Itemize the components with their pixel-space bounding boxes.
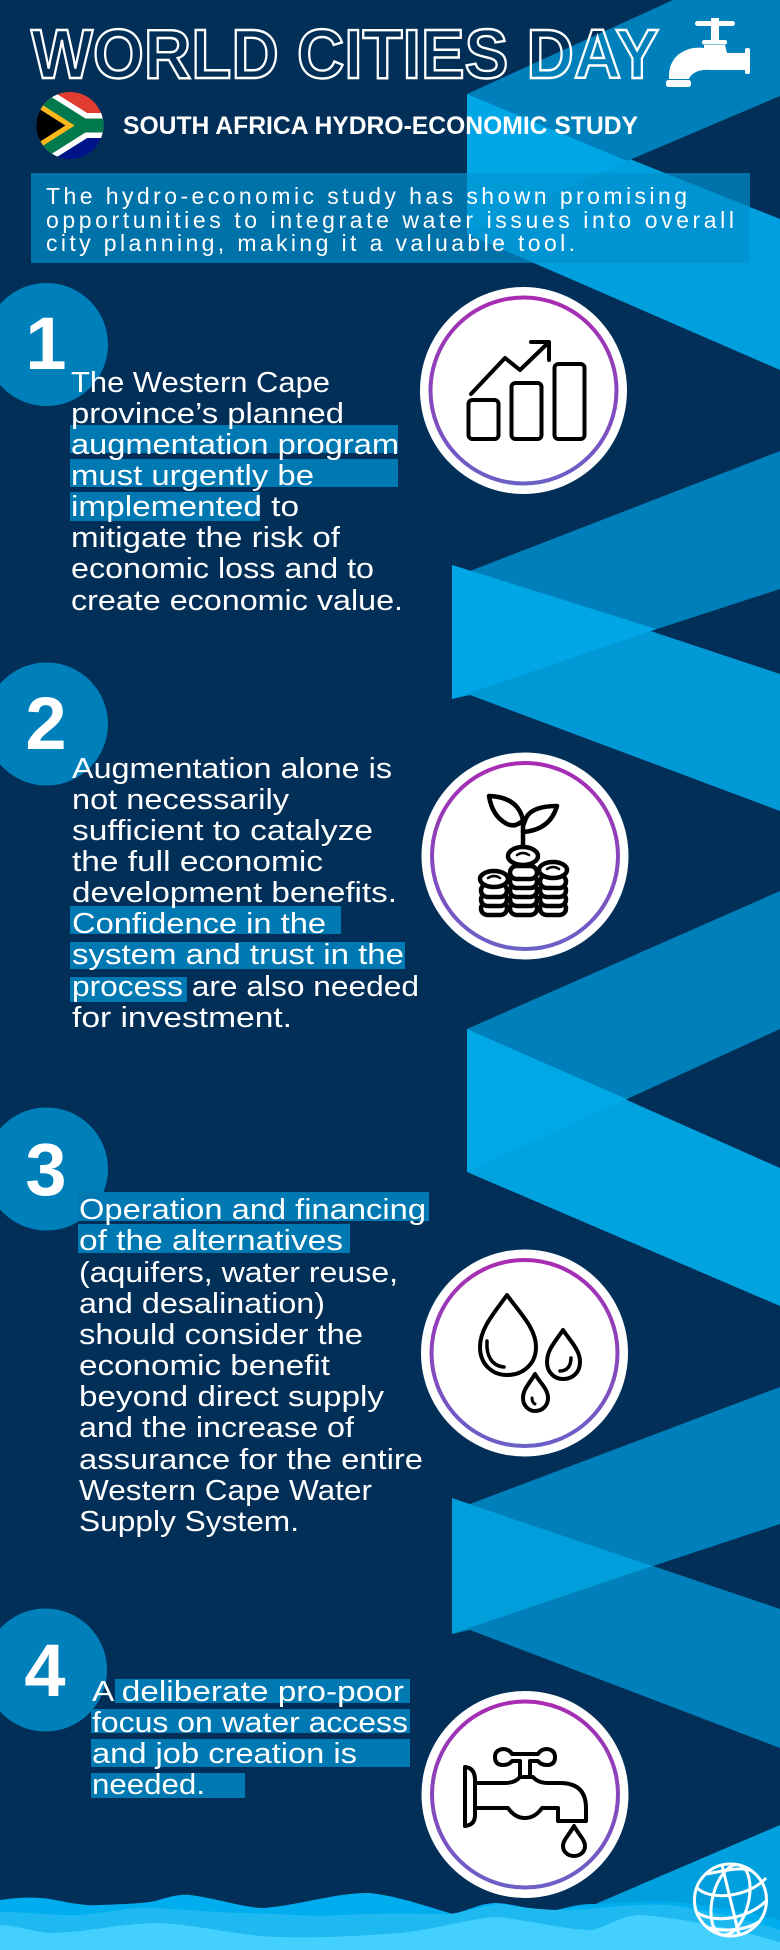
text block 3: economic benefit	[79, 1350, 330, 1382]
text block 1: create economic value.	[71, 585, 403, 617]
intro text panel: city planning, making it a valuable tool.	[46, 230, 575, 256]
icon: World Bank globe logo	[694, 1861, 767, 1939]
number badge 2: 2	[25, 682, 67, 765]
title: WORLD CITIES DAY	[31, 15, 659, 93]
text block 3: (aquifers, water reuse,	[79, 1257, 398, 1289]
text block 3: Supply System.	[79, 1506, 299, 1538]
intro text panel: The hydro-economic study has shown promising	[46, 183, 687, 209]
icon circle 2: plant and coins	[422, 752, 628, 960]
text block 4: and job creation is	[92, 1738, 357, 1770]
text block 1: implemented to	[71, 491, 299, 523]
text block 3: should consider the	[79, 1319, 363, 1351]
icon: white water tap	[666, 18, 750, 87]
text block 3: and the increase of	[79, 1412, 355, 1444]
text block 2: development benefits.	[72, 877, 397, 909]
number badge 3	[0, 1108, 108, 1230]
text block 1: must urgently be	[71, 460, 314, 492]
number badge 4: 4	[24, 1629, 66, 1712]
text block 3: and desalination)	[79, 1288, 325, 1320]
text block 1: economic loss and to	[71, 553, 374, 585]
text block 3: Western Cape Water	[79, 1475, 372, 1507]
text block 4	[91, 1676, 410, 1801]
text block 2: for investment.	[72, 1002, 292, 1034]
text block 1: The Western Cape	[71, 367, 330, 399]
water waves	[0, 1893, 780, 1950]
intro text panel	[46, 183, 734, 256]
text block 3: beyond direct supply	[79, 1381, 385, 1413]
icon circle 4: dripping faucet	[422, 1691, 628, 1898]
text block 2: sufficient to catalyze	[72, 815, 373, 847]
text block 3: Operation and financing	[79, 1194, 426, 1226]
text block 1	[70, 367, 403, 617]
text block 4: A deliberate pro-poor	[92, 1676, 404, 1708]
text block 2: system and trust in the	[72, 939, 404, 971]
icon circle 3: water drops	[421, 1250, 628, 1456]
icon: South Africa flag	[36, 92, 104, 159]
text block 4: focus on water access	[92, 1707, 408, 1739]
text block 2: Confidence in the	[72, 908, 326, 940]
intro text panel: opportunities to integrate water issues into overall	[46, 207, 734, 233]
text block 2	[70, 753, 419, 1034]
text block 2: the full economic	[72, 846, 323, 878]
text block 3: of the alternatives	[79, 1225, 343, 1257]
number badge 4	[0, 1608, 107, 1732]
text block 1: mitigate the risk of	[71, 522, 341, 554]
icon circle 1: growth chart	[420, 287, 627, 494]
text block 2: not necessarily	[72, 784, 290, 816]
subtitle: SOUTH AFRICA HYDRO-ECONOMIC STUDY	[123, 112, 638, 140]
text block 1: augmentation program	[71, 429, 399, 461]
text block 2: Augmentation alone is	[72, 753, 392, 785]
text block 1: province’s planned	[71, 398, 344, 430]
number badge 3: 3	[25, 1128, 67, 1211]
number badge 1	[0, 283, 108, 406]
text block 2: process are also needed	[72, 971, 419, 1003]
number badge 2	[0, 662, 108, 786]
text block 4: needed.	[92, 1769, 205, 1801]
text block 3: assurance for the entire	[79, 1444, 423, 1476]
text block 3	[78, 1192, 429, 1538]
number badge 1: 1	[25, 302, 67, 385]
